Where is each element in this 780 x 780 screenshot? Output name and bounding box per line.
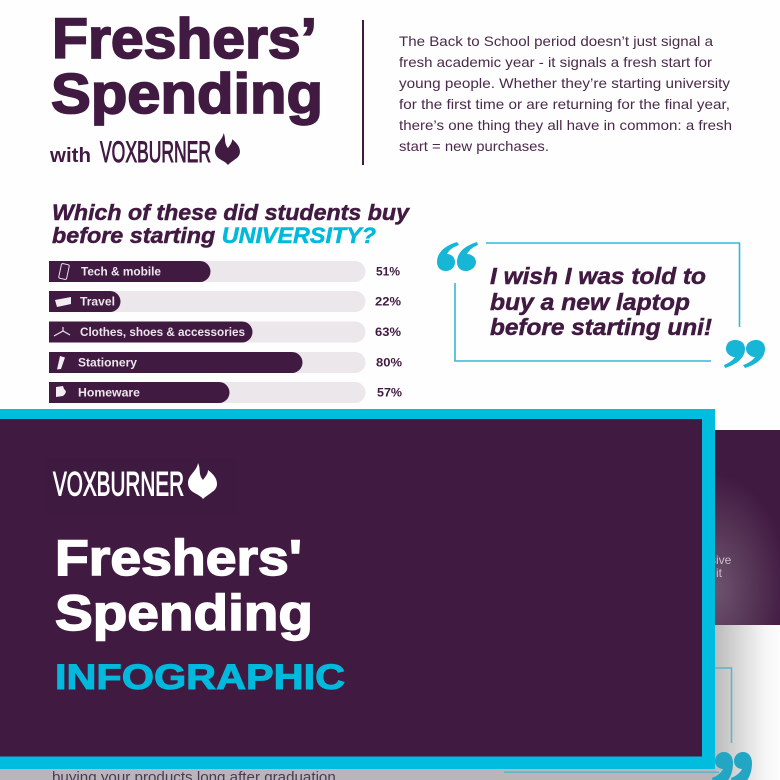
bar chart	[49, 261, 402, 403]
title	[51, 7, 323, 126]
icon: opening quote	[437, 242, 478, 271]
quote text: I wish I was told to	[490, 263, 706, 289]
card title: Freshers'	[55, 530, 302, 586]
bar: clothes	[49, 322, 401, 342]
bar: stationery: Stationery	[78, 358, 138, 370]
bar: stationery	[49, 352, 402, 373]
bar: homeware: 57%	[377, 388, 402, 400]
quote text: buy a new laptop	[490, 289, 690, 315]
intro text: there’s one thing they all have in common: a fresh	[399, 117, 732, 133]
bar: travel: 22%	[375, 296, 401, 308]
bar: travel	[49, 291, 401, 312]
intro text: The Back to School period doesn’t just signal a	[399, 33, 713, 49]
card logo: VOXBURNER	[53, 466, 184, 504]
quote text: before starting uni!	[490, 314, 712, 340]
title card	[0, 409, 715, 769]
card logo	[45, 458, 238, 515]
divider	[362, 20, 364, 165]
bar: clothes: Clothes, shoes & accessories	[80, 327, 245, 339]
bar: tech and mobile: 51%	[376, 266, 400, 278]
bar: travel: Travel	[80, 296, 115, 308]
bar: homeware	[49, 382, 402, 403]
with Voxburner logo: with	[49, 145, 91, 167]
bottom strip behind card	[0, 752, 752, 780]
chart heading: before starting UNIVERSITY?	[52, 223, 376, 248]
intro text: young people. Whether they’re starting university	[399, 75, 730, 91]
intro text: for the first time or are returning for the final year,	[399, 96, 730, 112]
card title	[55, 530, 313, 641]
bar: tech and mobile	[49, 261, 400, 282]
title: Freshers’	[52, 7, 317, 71]
icon: closing quote	[724, 340, 765, 368]
bar: tech and mobile: Tech & mobile	[81, 266, 161, 278]
background panel behind card	[700, 430, 780, 780]
intro text	[399, 33, 732, 154]
with Voxburner logo	[49, 133, 240, 169]
card title: Spending	[55, 585, 313, 641]
quote callout	[437, 242, 765, 368]
background panel behind card: sive	[710, 553, 732, 567]
bar: clothes: 63%	[375, 327, 401, 339]
title: Spending	[51, 62, 323, 126]
intro text: fresh academic year - it signals a fresh start for	[399, 54, 712, 70]
quote text	[490, 263, 712, 340]
background panel behind card: it	[716, 566, 723, 580]
bar: homeware: Homeware	[78, 388, 140, 400]
intro text: start = new purchases.	[399, 138, 549, 154]
card subtitle: INFOGRAPHIC	[55, 658, 345, 697]
with Voxburner logo: VOXBURNER	[100, 136, 211, 169]
chart heading	[52, 200, 411, 248]
bar: stationery: 80%	[376, 358, 402, 370]
chart heading: Which of these did students buy	[52, 200, 411, 225]
